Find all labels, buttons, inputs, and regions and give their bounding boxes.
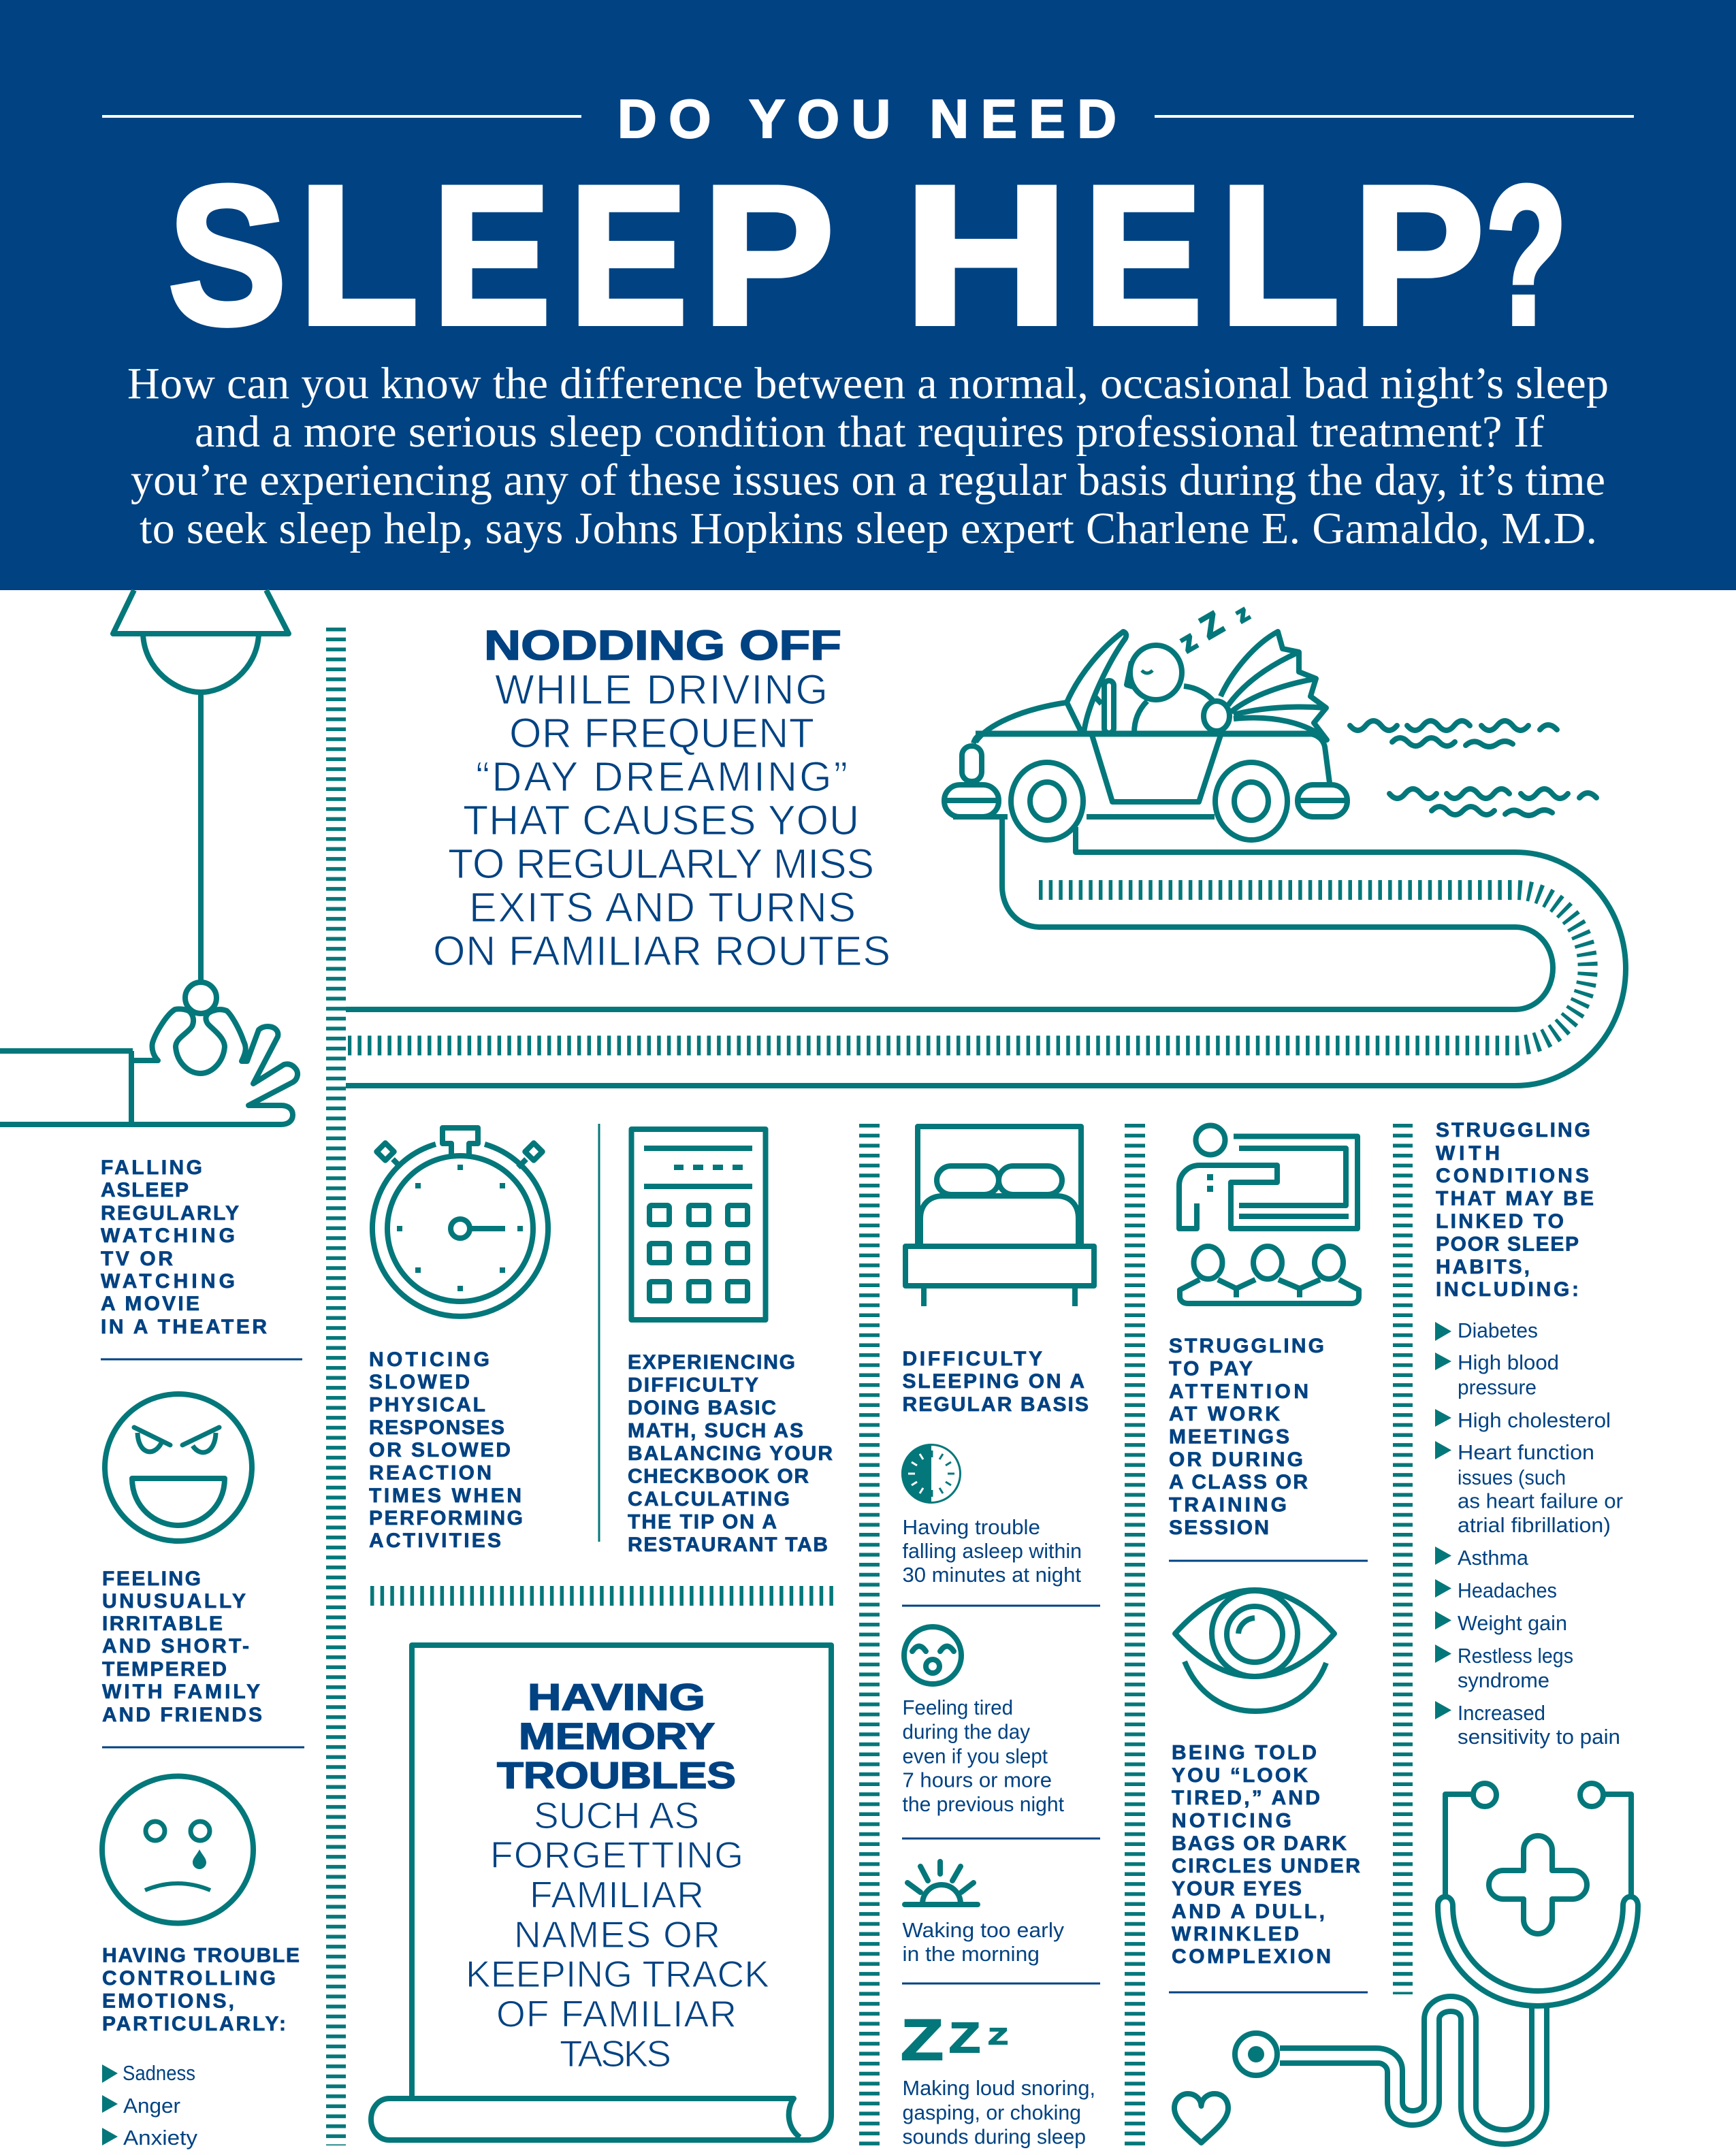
title: sleep help: ? <box>1485 145 1567 366</box>
text: feeling unusually irritable: WITH FAMILY <box>102 1681 260 1703</box>
title: sleep help: E <box>432 145 551 366</box>
title: sleep help: P <box>1353 145 1484 366</box>
text: difficulty sleeping: REGULAR BASIS <box>903 1393 1089 1416</box>
text: falling asleep watching tv: WATCHING <box>101 1270 235 1293</box>
text: trouble controlling emotions: HAVING TROUBLE <box>102 1944 300 1967</box>
list: conditions: Weight gain <box>1458 1611 1567 1635</box>
text: difficulty sleeping <box>903 1348 1089 1416</box>
text: feeling unusually irritable: IRRITABLE <box>102 1613 223 1635</box>
text: falling asleep watching tv <box>101 1156 267 1338</box>
list: conditions: atrial fibrillation) <box>1458 1513 1611 1537</box>
icon: tired eye <box>1175 1590 1334 1711</box>
list: conditions: Asthma <box>1458 1546 1529 1570</box>
heading: nodding off: ON FAMILIAR ROUTES <box>433 928 890 974</box>
text: struggling to pay attention: MEETINGS <box>1169 1425 1289 1448</box>
text: noticing slowed responses: REACTION <box>369 1462 492 1484</box>
text: feeling tired: during the day <box>903 1719 1030 1744</box>
list: conditions: syndrome <box>1458 1668 1549 1692</box>
heading: nodding off: “DAY DREAMING” <box>476 754 848 800</box>
text: struggling to pay attention: TRAINING <box>1169 1493 1287 1517</box>
title: sleep help <box>168 145 1567 366</box>
list: conditions: Diabetes <box>1458 1318 1538 1342</box>
text: struggling to pay attention: ATTENTION <box>1169 1380 1308 1403</box>
text: falling asleep watching tv: FALLING <box>101 1156 202 1179</box>
panel: scroll with memory troubles <box>371 1645 831 2140</box>
text: loud snoring: sounds during sleep <box>903 2125 1086 2148</box>
text: trouble falling asleep: 30 minutes at night <box>903 1563 1081 1587</box>
heading: nodding off: WHILE DRIVING <box>495 666 828 713</box>
icon: hanging lamp with pull cord <box>113 590 289 1014</box>
icon: snoring zzz: Z <box>988 2024 1008 2049</box>
text: struggling to pay attention: A CLASS OR <box>1169 1471 1308 1493</box>
icon: sad face with tear <box>102 1777 253 1924</box>
icon: bed <box>905 1127 1094 1306</box>
vertical tick column right <box>1393 1124 1413 1994</box>
heading: having memory troubles: MEMORY <box>519 1715 715 1757</box>
icon: snoring zzz <box>901 2008 1008 2073</box>
icon: rising sun <box>905 1862 978 1905</box>
text: experiencing difficulty with math: RESTAURANT TAB <box>628 1534 828 1556</box>
text: noticing slowed responses: PHYSICAL <box>369 1394 485 1416</box>
intro paragraph: you’re experiencing any of these issues on a regular basis during the day, it’s time <box>131 455 1605 505</box>
intro paragraph: and a more serious sleep condition that requires professional treatment? If <box>195 407 1544 457</box>
icon: zzz above driver: z <box>1174 624 1202 659</box>
list: conditions <box>1435 1318 1623 1749</box>
text: feeling unusually irritable: AND FRIENDS <box>102 1704 262 1726</box>
text: loud snoring: Making loud snoring, <box>903 2076 1095 2100</box>
heading: nodding off: NODDING OFF <box>484 622 841 668</box>
title: sleep help: H <box>903 145 1069 366</box>
text: trouble controlling emotions: CONTROLLING <box>102 1967 276 1990</box>
text: being told you look tired: YOU “LOOK <box>1172 1764 1308 1787</box>
title: sleep help: L <box>1219 145 1340 366</box>
heading: having memory troubles: HAVING <box>528 1676 705 1718</box>
text: noticing slowed responses <box>369 1348 523 1552</box>
text: struggling with conditions: THAT MAY BE <box>1436 1187 1594 1210</box>
text: noticing slowed responses: TIMES WHEN <box>369 1485 521 1507</box>
text: loud snoring: gasping, or choking <box>903 2101 1081 2124</box>
icon: angry face <box>105 1394 252 1541</box>
icon: presenter at board with audience <box>1179 1126 1359 1303</box>
text: struggling with conditions: STRUGGLING <box>1436 1119 1590 1141</box>
text: difficulty sleeping: SLEEPING ON A <box>903 1370 1084 1393</box>
heading: having memory troubles: NAMES OR <box>514 1913 720 1956</box>
list: conditions: Restless legs <box>1458 1644 1573 1668</box>
header background band <box>0 0 1736 590</box>
title: sleep help: S <box>168 145 287 366</box>
text: experiencing difficulty with math: THE TIP ON A <box>628 1511 777 1533</box>
heading: having memory troubles: KEEPING TRACK <box>466 1953 769 1995</box>
title: sleep help: L <box>298 145 419 366</box>
heading: having memory troubles <box>466 1676 769 2075</box>
text: feeling tired: 7 hours or more <box>903 1768 1052 1792</box>
icon: zzz above driver: z <box>1231 600 1254 628</box>
list: emotions: Sadness <box>123 2061 195 2085</box>
text: falling asleep watching tv: ASLEEP <box>101 1179 189 1201</box>
icon: zzz above driver <box>1174 600 1254 659</box>
icon: yawning tired face <box>904 1627 961 1684</box>
text: struggling with conditions: WITH <box>1436 1142 1500 1165</box>
list: conditions: pressure <box>1458 1376 1537 1399</box>
text: feeling tired <box>903 1696 1064 1816</box>
text: being told you look tired: WRINKLED <box>1172 1923 1299 1945</box>
text: being told you look tired: NOTICING <box>1172 1809 1291 1832</box>
icon: snoring zzz: Z <box>949 2015 980 2062</box>
icon: calculator <box>632 1129 765 1320</box>
text: experiencing difficulty with math: DIFFICULTY <box>628 1374 758 1397</box>
text: struggling with conditions: INCLUDING: <box>1436 1278 1579 1301</box>
text: noticing slowed responses: NOTICING <box>369 1348 489 1371</box>
text: struggling with conditions: HABITS, <box>1436 1256 1530 1278</box>
heading: nodding off: OR FREQUENT <box>509 710 814 756</box>
text: experiencing difficulty with math: CHECKBOOK OR <box>628 1465 809 1488</box>
title: sleep help: E <box>1084 145 1202 366</box>
text: struggling with conditions: POOR SLEEP <box>1436 1233 1579 1255</box>
icon: car with sleeping driver <box>944 632 1347 840</box>
text: noticing slowed responses: ACTIVITIES <box>369 1529 501 1552</box>
vertical tick column center right <box>1125 1124 1145 2145</box>
text: being told you look tired: AND A DULL, <box>1172 1900 1325 1923</box>
text: being told you look tired: COMPLEXION <box>1172 1945 1331 1968</box>
list: conditions: as heart failure or <box>1458 1489 1623 1513</box>
text: noticing slowed responses: PERFORMING <box>369 1507 523 1529</box>
text: being told you look tired: BEING TOLD <box>1172 1741 1317 1764</box>
text: trouble falling asleep: falling asleep within <box>903 1539 1082 1563</box>
title: sleep help: E <box>569 145 688 366</box>
text: feeling unusually irritable: UNUSUALLY <box>102 1590 246 1613</box>
text: experiencing difficulty with math: CALCULATING <box>628 1488 790 1510</box>
text: struggling to pay attention <box>1169 1335 1324 1539</box>
heading: nodding off: TO REGULARLY MISS <box>448 841 874 887</box>
text: trouble controlling emotions: EMOTIONS, <box>102 1990 234 2012</box>
text: struggling to pay attention: STRUGGLING <box>1169 1335 1324 1357</box>
heading: having memory troubles: TASKS <box>560 2032 671 2075</box>
heading: nodding off <box>433 622 890 974</box>
text: loud snoring <box>903 2076 1095 2148</box>
text: trouble controlling emotions <box>102 1944 300 2035</box>
list: conditions: Increased <box>1458 1701 1545 1725</box>
heading: having memory troubles: OF FAMILIAR <box>496 1993 737 2035</box>
text: being told you look tired: TIRED,” AND <box>1172 1787 1320 1809</box>
list: conditions: Headaches <box>1458 1578 1557 1602</box>
icon: half-shaded clock <box>901 1444 960 1504</box>
text: feeling unusually irritable: TEMPERED <box>102 1658 227 1681</box>
text: falling asleep watching tv: IN A THEATER <box>101 1316 267 1338</box>
icon: hand pulling cord <box>0 1009 298 1124</box>
heading: having memory troubles: TROUBLES <box>497 1754 736 1796</box>
text: being told you look tired: BAGS OR DARK <box>1172 1832 1347 1855</box>
text: feeling unusually irritable: FEELING <box>102 1568 201 1590</box>
text: noticing slowed responses: OR SLOWED <box>369 1439 511 1461</box>
text: falling asleep watching tv: TV OR <box>101 1248 173 1270</box>
text: being told you look tired <box>1172 1741 1360 1968</box>
text: noticing slowed responses: SLOWED <box>369 1371 470 1393</box>
text: struggling with conditions: LINKED TO <box>1436 1210 1564 1233</box>
icon: stopwatch <box>372 1128 548 1316</box>
text: feeling unusually irritable: AND SHORT- <box>102 1635 249 1657</box>
text: experiencing difficulty with math: EXPERIENCING <box>628 1351 795 1374</box>
text: feeling tired: Feeling tired <box>903 1696 1013 1719</box>
text: waking too early <box>903 1918 1065 1966</box>
title: sleep help: P <box>703 145 831 366</box>
intro paragraph <box>127 359 1609 553</box>
text: falling asleep watching tv: A MOVIE <box>101 1293 199 1315</box>
text: experiencing difficulty with math: MATH, SUCH AS <box>628 1420 803 1442</box>
heading: do you need with side rules: DO YOU NEED <box>617 88 1116 149</box>
text: experiencing difficulty with math: BALANCING YOUR <box>628 1442 833 1465</box>
text: struggling to pay attention: TO PAY <box>1169 1357 1253 1380</box>
text: being told you look tired: CIRCLES UNDER <box>1172 1855 1360 1877</box>
text: trouble falling asleep: Having trouble <box>903 1515 1040 1539</box>
vertical tick column center <box>859 1124 880 2145</box>
icon: stethoscope <box>1235 1783 1638 2144</box>
text: feeling tired: even if you slept <box>903 1744 1048 1768</box>
icon: snoring zzz: Z <box>901 2008 944 2073</box>
heading: do you need with side rules <box>102 88 1634 149</box>
text: struggling to pay attention: SESSION <box>1169 1517 1269 1539</box>
text: struggling with conditions <box>1436 1119 1594 1301</box>
text: being told you look tired: YOUR EYES <box>1172 1877 1302 1900</box>
text: trouble controlling emotions: PARTICULARLY: <box>102 2013 286 2035</box>
list: conditions: Heart function <box>1458 1440 1594 1464</box>
list: conditions: High blood <box>1458 1350 1559 1374</box>
list: conditions: sensitivity to pain <box>1458 1725 1620 1749</box>
text: trouble falling asleep <box>903 1515 1082 1587</box>
text: feeling tired: the previous night <box>903 1792 1064 1816</box>
text: struggling with conditions: CONDITIONS <box>1436 1165 1589 1187</box>
text: waking too early: in the morning <box>903 1942 1040 1966</box>
text: feeling unusually irritable <box>102 1568 262 1726</box>
intro paragraph: How can you know the difference between a normal, occasional bad night’s sleep <box>127 359 1609 408</box>
text: struggling to pay attention: AT WORK <box>1169 1403 1280 1425</box>
heading: having memory troubles: FORGETTING <box>490 1834 743 1876</box>
text: noticing slowed responses: RESPONSES <box>369 1416 504 1439</box>
list: conditions: issues (such <box>1458 1465 1566 1489</box>
heading: nodding off: THAT CAUSES YOU <box>463 797 859 843</box>
icon: heart <box>1174 2094 1228 2143</box>
icon: zzz above driver: Z <box>1194 605 1229 647</box>
text: experiencing difficulty with math <box>628 1351 833 1556</box>
text: difficulty sleeping: DIFFICULTY <box>903 1348 1042 1370</box>
list: emotions <box>102 2061 198 2150</box>
heading: having memory troubles: SUCH AS <box>534 1794 699 1836</box>
vertical tick column left <box>326 628 346 2145</box>
heading: nodding off: EXITS AND TURNS <box>469 884 856 930</box>
list: emotions: Anger <box>123 2094 180 2118</box>
text: struggling to pay attention: OR DURING <box>1169 1448 1303 1471</box>
intro paragraph: to seek sleep help, says Johns Hopkins sleep expert Charlene E. Gamaldo, M.D. <box>140 504 1597 553</box>
text: experiencing difficulty with math: DOING BASIC <box>628 1397 776 1419</box>
icon: wind waves behind car <box>1350 721 1596 815</box>
text: falling asleep watching tv: REGULARLY <box>101 1202 239 1225</box>
heading: having memory troubles: FAMILIAR <box>530 1873 704 1915</box>
text: falling asleep watching tv: WATCHING <box>101 1225 235 1247</box>
list: conditions: High cholesterol <box>1458 1408 1611 1432</box>
road with winding lines <box>346 817 1626 1086</box>
list: emotions: Anxiety <box>123 2126 198 2150</box>
text: waking too early: Waking too early <box>903 1918 1065 1942</box>
